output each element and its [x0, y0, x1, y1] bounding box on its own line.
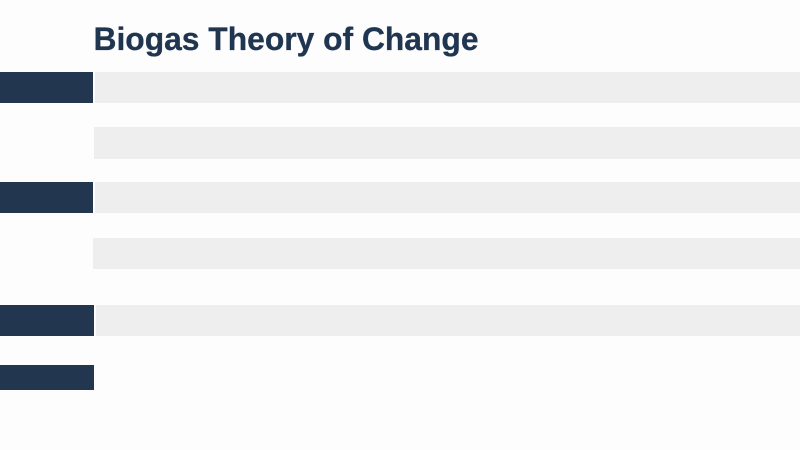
- row 5: dark label block and grey bar: [0, 305, 800, 336]
- row 3: dark label block and grey bar: [0, 182, 800, 213]
- row 4: empty label block and grey bar: [93, 238, 800, 269]
- title: Biogas Theory of Change: [94, 21, 478, 57]
- row 6: dark label block: [0, 365, 94, 390]
- row 2: empty label block and grey bar: [94, 127, 800, 159]
- row 1: dark label block and grey bar: [0, 72, 800, 103]
